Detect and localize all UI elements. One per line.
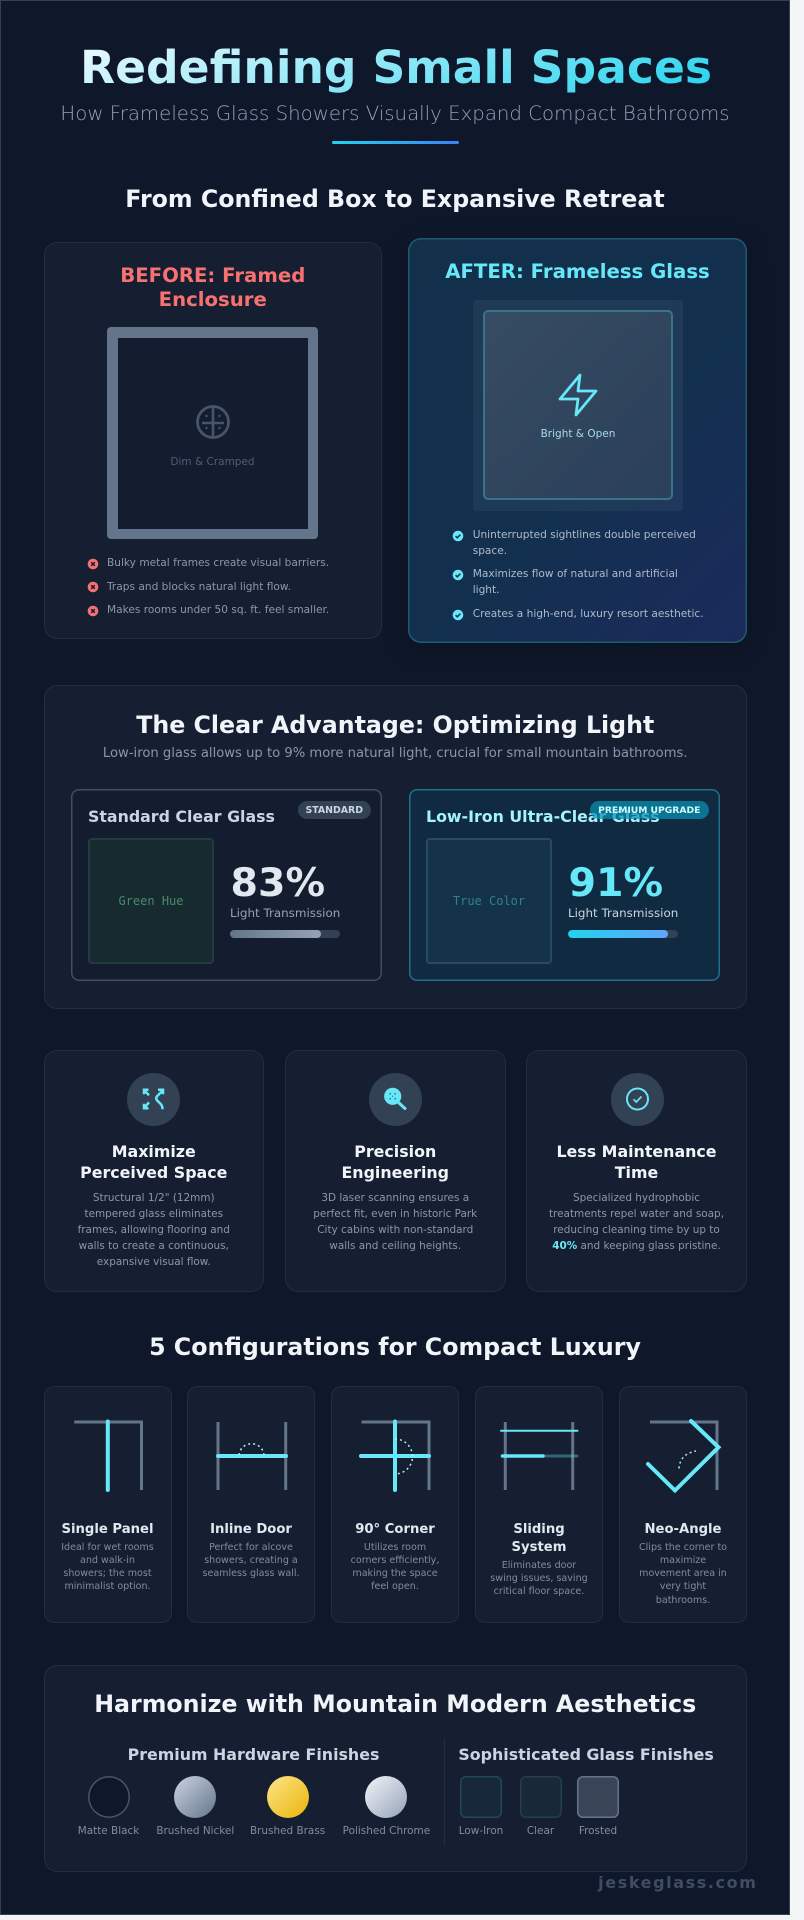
feature description <box>78 1192 230 1268</box>
config card: inline door <box>187 1386 315 1623</box>
icon: dim light <box>196 405 230 439</box>
swatch: clear: Clear <box>527 1825 554 1837</box>
config description: Perfect for alcove <box>209 1542 293 1553</box>
feature card: less maintenance time <box>526 1050 747 1292</box>
stat label: Light Transmission <box>568 906 678 920</box>
config description: very tight <box>660 1581 706 1592</box>
glass pane <box>483 310 673 500</box>
vertical divider <box>444 1738 445 1846</box>
swatch: true color: True Color <box>453 894 525 908</box>
swatch: green hue <box>88 838 214 964</box>
swatch: frosted: Frosted <box>579 1825 617 1837</box>
config description: critical floor space. <box>494 1586 584 1597</box>
feature title <box>556 1142 717 1182</box>
feature description <box>313 1192 477 1252</box>
swatch: polished chrome: Polished Chrome <box>343 1825 430 1837</box>
swatch: brushed brass <box>250 1776 325 1837</box>
bullet 3: Creates a high-end, luxury resort aesthetic. <box>473 608 704 620</box>
feature description: perfect fit, even in historic Park <box>313 1208 477 1220</box>
after heading: AFTER: Frameless Glass <box>445 260 710 283</box>
icon: lightning bolt <box>558 374 598 416</box>
config title: Single Panel <box>62 1522 153 1537</box>
feature description: Specialized hydrophobic <box>573 1192 700 1204</box>
stat: 91 percent: 91% <box>568 860 663 906</box>
config card: 90 degree corner <box>331 1386 459 1623</box>
feature card: precision engineering <box>285 1050 506 1292</box>
diagram: 90 degree corner <box>359 1420 431 1492</box>
config description: Eliminates door <box>502 1560 576 1571</box>
feature description: walls to create a continuous, <box>79 1240 229 1252</box>
panel: mountain modern aesthetics <box>44 1665 747 1872</box>
config description: feel open. <box>371 1581 419 1592</box>
feature title <box>341 1142 449 1182</box>
clear advantage description: Low-iron glass allows up to 9% more natural light, crucial for small mountain bathrooms. <box>103 746 688 761</box>
heading: configurations: 5 Configurations for Compact Luxury <box>149 1333 641 1361</box>
frameless glass diagram <box>473 300 683 511</box>
config title: 90° Corner <box>355 1522 435 1537</box>
dim label: Dim & Cramped <box>170 456 255 468</box>
swatch: low-iron <box>459 1776 503 1837</box>
heading: before and after: From Confined Box to Expansive Retreat <box>125 185 665 213</box>
config description: Utilizes room <box>364 1542 426 1553</box>
config title: Inline Door <box>210 1522 292 1537</box>
feature description: frames, allowing flooring and <box>78 1224 230 1236</box>
after bullet list <box>452 529 704 620</box>
swatch: green hue: Green Hue <box>118 894 184 908</box>
config description <box>351 1542 439 1592</box>
hardware heading: Premium Hardware Finishes <box>128 1745 379 1764</box>
stat label: Light Transmission <box>230 906 340 920</box>
swatch: brushed nickel <box>156 1776 234 1837</box>
before heading: Enclosure <box>159 288 267 311</box>
config title: Neo-Angle <box>644 1522 722 1537</box>
feature description: walls and ceiling heights. <box>329 1240 461 1252</box>
watermark: jeskeglass.com <box>598 1872 758 1892</box>
feature description: tempered glass eliminates <box>84 1208 223 1220</box>
card: low-iron ultra-clear glass <box>409 789 720 981</box>
diagram: single panel <box>74 1420 143 1492</box>
config description: seamless glass wall. <box>202 1568 300 1579</box>
config description: showers; the most <box>63 1568 152 1579</box>
diagram: neo-angle <box>646 1418 722 1494</box>
panel: the clear advantage <box>44 685 747 1009</box>
feature description: treatments repel water and soap, <box>549 1208 724 1220</box>
config description: making the space <box>352 1568 438 1579</box>
swatch: brushed nickel: Brushed Nickel <box>156 1825 234 1837</box>
feature description: City cabins with non-standard <box>317 1224 473 1236</box>
panel: before <box>44 242 382 639</box>
feature title: Perceived Space <box>80 1163 227 1182</box>
bullet 1 <box>452 529 696 557</box>
bullet 2: Maximizes flow of natural and artificial <box>473 568 678 580</box>
feature description: 40% and keeping glass pristine. <box>552 1240 721 1252</box>
config title: System <box>512 1540 566 1555</box>
bullet 3: Makes rooms under 50 sq. ft. feel smaller. <box>107 604 329 616</box>
icon: check circle <box>610 1073 664 1126</box>
feature description <box>549 1192 724 1252</box>
title divider <box>332 141 459 144</box>
config card: sliding system <box>475 1386 603 1623</box>
config card: single panel <box>44 1386 172 1623</box>
glass heading: Sophisticated Glass Finishes <box>458 1745 714 1764</box>
frame interior <box>118 338 308 528</box>
bullet 1: space. <box>473 545 507 557</box>
config description <box>490 1560 588 1597</box>
config description: showers, creating a <box>204 1555 298 1566</box>
diagram: inline door <box>216 1422 288 1490</box>
aesthetics heading: Harmonize with Mountain Modern Aesthetics <box>94 1690 696 1718</box>
config description: swing issues, saving <box>490 1573 588 1584</box>
swatch: matte black <box>78 1776 140 1837</box>
config description <box>639 1542 727 1606</box>
feature title: Less Maintenance <box>556 1142 717 1161</box>
bullet 2 <box>452 568 678 596</box>
badge: standard <box>298 801 370 819</box>
before heading <box>120 264 305 311</box>
swatch: low-iron: Low-Iron <box>459 1825 503 1837</box>
feature description: 3D laser scanning ensures a <box>321 1192 469 1204</box>
feature description: reducing cleaning time by up to <box>553 1224 720 1236</box>
feature title: Precision <box>354 1142 436 1161</box>
progress bar: 83 percent <box>230 930 340 938</box>
swatch: true color <box>426 838 552 964</box>
config description: maximize <box>660 1555 706 1566</box>
swatch: frosted <box>577 1776 619 1837</box>
swatch: clear <box>520 1776 562 1837</box>
bullet 2: light. <box>473 584 500 596</box>
config description: minimalist option. <box>64 1581 151 1592</box>
feature title: Maximize <box>112 1142 196 1161</box>
clear advantage heading: The Clear Advantage: Optimizing Light <box>136 711 654 739</box>
config description <box>61 1542 154 1592</box>
feature title: Engineering <box>341 1163 449 1182</box>
progress bar: 91 percent <box>568 930 678 938</box>
config title: Sliding <box>513 1522 565 1537</box>
config title <box>512 1522 566 1555</box>
card title: Standard Clear Glass <box>88 807 275 826</box>
config description <box>202 1542 300 1579</box>
panel: after <box>408 238 747 643</box>
stat: 83 percent: 83% <box>230 860 325 906</box>
subtitle: How Frameless Glass Showers Visually Expand Compact Bathrooms <box>60 102 730 125</box>
before heading: BEFORE: Framed <box>120 264 305 287</box>
config description: bathrooms. <box>656 1595 710 1606</box>
badge: premium upgrade <box>590 801 708 819</box>
swatch: matte black: Matte Black <box>78 1825 139 1837</box>
bullet 1: Bulky metal frames create visual barriers. <box>107 557 329 569</box>
feature title: Time <box>615 1163 658 1182</box>
config description: and walk-in <box>80 1555 135 1566</box>
card title: Low-Iron Ultra-Clear Glass <box>426 807 660 826</box>
bullet 2: Traps and blocks natural light flow. <box>107 581 291 593</box>
diagram: sliding system <box>500 1422 579 1490</box>
bright label: Bright & Open <box>541 428 615 440</box>
feature card: maximize perceived space <box>44 1050 264 1292</box>
config card: neo-angle <box>619 1386 747 1623</box>
badge: premium upgrade: PREMIUM UPGRADE <box>598 805 700 816</box>
feature title <box>80 1142 227 1182</box>
bullet 1: Uninterrupted sightlines double perceived <box>473 529 696 541</box>
config description: corners efficiently, <box>351 1555 439 1566</box>
feature description: Structural 1/2" (12mm) <box>93 1192 215 1204</box>
swatch: polished chrome <box>343 1776 430 1837</box>
config description: movement area in <box>639 1568 727 1579</box>
badge: standard: STANDARD <box>305 805 363 816</box>
title: Redefining Small Spaces <box>80 41 712 94</box>
before bullet list <box>88 557 329 616</box>
card: standard clear glass <box>71 789 382 981</box>
icon: expand arrows <box>127 1073 180 1126</box>
framed enclosure diagram <box>107 327 318 539</box>
feature description: expansive visual flow. <box>97 1256 211 1268</box>
swatch: brushed brass: Brushed Brass <box>250 1825 325 1837</box>
config description: Clips the corner to <box>639 1542 727 1553</box>
config description: Ideal for wet rooms <box>61 1542 154 1553</box>
icon: laser scan magnifier <box>369 1073 422 1126</box>
